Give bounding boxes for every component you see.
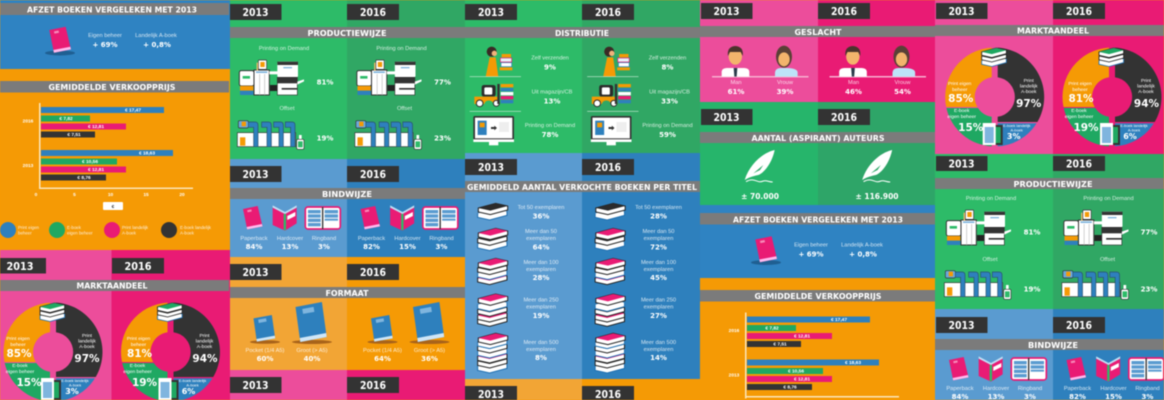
2016 book stacks: exemplaren bbox=[644, 304, 673, 310]
2016 distribution: 33% bbox=[661, 98, 678, 106]
2016 production: 23% bbox=[1141, 286, 1157, 294]
panel: aantal aspirant auteurs (column 4): 2016 bbox=[831, 111, 857, 124]
year labels: bottom of column 2 bbox=[230, 377, 399, 393]
bar chart: prices: 0 bbox=[35, 192, 38, 198]
donut chart: 2013: A-boek bbox=[69, 382, 81, 388]
heading: afzet boeken: AFZET BOEKEN VERGELEKEN MET 2013 bbox=[27, 6, 197, 14]
2016 binding bbox=[358, 205, 458, 251]
donut chart: 2013: landelijk bbox=[78, 338, 96, 344]
legend: A-boek bbox=[180, 230, 195, 236]
legend: eigen beheer bbox=[67, 230, 93, 236]
donut chart: 2016: E-boek bbox=[130, 363, 146, 369]
heading: bindwijze: BINDWIJZE bbox=[1028, 341, 1078, 350]
panel: bindwijze (column 2): 2016 bbox=[360, 168, 386, 181]
bar chart: prices: € 7,51 bbox=[67, 132, 81, 138]
panel: productiewijze (column 5): 2013 bbox=[948, 158, 974, 170]
panel: marktaandeel (column 1) bbox=[0, 258, 229, 400]
heading: geslacht: GESLACHT bbox=[794, 28, 842, 37]
2016 gender: 46% bbox=[845, 88, 862, 96]
donut chart: 2013: E-boek landelijk bbox=[61, 378, 89, 383]
2016 production: Offset bbox=[397, 106, 412, 112]
panel: aantal aspirant auteurs (column 4): 2013 bbox=[714, 111, 740, 124]
donut chart: 2016: A-boek bbox=[186, 382, 199, 388]
2013 book stacks: 19% bbox=[533, 312, 549, 320]
donut chart: 2016: 94% bbox=[1134, 98, 1160, 110]
panel: gemiddeld aantal verkochte boeken per titel (column 3): 2016 bbox=[595, 161, 621, 174]
donut chart: 2016 bbox=[1062, 48, 1161, 146]
heading: gemiddelde verkoopprijs: GEMIDDELDE VERKOOPPRIJS bbox=[754, 292, 882, 301]
donut chart: 2016: landelijk bbox=[196, 338, 214, 344]
donut chart: 2013: A-boek bbox=[1021, 89, 1037, 95]
2016 book stacks: Tot 50 exemplaren bbox=[635, 205, 682, 211]
legend: beheer bbox=[18, 230, 32, 236]
panel: geslacht (column 4) bbox=[700, 3, 935, 96]
2016 book stacks: Meer dan 500 bbox=[641, 340, 676, 346]
2013 gender: 39% bbox=[777, 88, 793, 96]
2013 production: Offset bbox=[982, 257, 998, 263]
2013 binding: 3% bbox=[318, 243, 330, 251]
donut chart: 2016: A-boek bbox=[1138, 89, 1154, 95]
2016 distribution: 59% bbox=[659, 131, 676, 139]
bar chart: prices: € 7,51 bbox=[773, 342, 787, 348]
donut chart: 2016: 81% bbox=[1068, 93, 1094, 105]
2013 production: 19% bbox=[317, 134, 333, 142]
donut chart: 2016: 94% bbox=[192, 353, 218, 365]
2016 book stacks: exemplaren bbox=[644, 236, 673, 242]
donut chart: 2016: 19% bbox=[132, 377, 158, 389]
donut chart: 2013: beheer bbox=[10, 342, 26, 348]
panel: distributie (column 3): 2013 bbox=[478, 6, 504, 19]
2013 production bbox=[237, 46, 333, 149]
2016 production: 77% bbox=[1141, 228, 1157, 236]
2013 book stacks: exemplaren bbox=[526, 347, 556, 353]
2016 production bbox=[355, 46, 451, 149]
bar chart: prices: € 8,76 bbox=[783, 385, 797, 391]
heading: auteurs: AANTAL (ASPIRANT) AUTEURS bbox=[752, 134, 885, 143]
donut chart: 2013 bbox=[3, 303, 102, 400]
donut chart: 2013: landelijk bbox=[1020, 84, 1038, 90]
panel: gemiddeld aantal verkochte boeken per titel (column 3): 2013 bbox=[478, 161, 504, 174]
panel: geslacht (column 4): 2016 bbox=[831, 5, 857, 18]
panel: productiewijze (column 5): 2016 bbox=[1066, 158, 1092, 170]
2013 book stacks: 28% bbox=[533, 274, 549, 282]
2013 distribution: 13% bbox=[544, 98, 560, 106]
heading: distributie: DISTRIBUTIE bbox=[555, 29, 609, 38]
donut chart: 2013: Print eigen bbox=[6, 336, 30, 342]
heading: boeken per titel: GEMIDDELD AANTAL VERKOCHTE BOEKEN PER TITEL bbox=[467, 183, 697, 192]
donut chart: 2013: 15% bbox=[16, 377, 42, 389]
panel: aantal aspirant auteurs (column 4): ± 70.000 bbox=[741, 192, 779, 201]
year labels: bottom of column 2: 2016 bbox=[360, 379, 386, 392]
panel: distributie (column 3): 2016 bbox=[595, 6, 621, 19]
bar chart: prices: 2016 bbox=[729, 328, 740, 334]
2013 production: 81% bbox=[317, 78, 333, 86]
2013 production bbox=[944, 196, 1040, 299]
donut chart: 2016 bbox=[121, 303, 220, 400]
2013 binding: Paperback bbox=[240, 236, 268, 242]
2016 gender bbox=[830, 46, 926, 96]
panel: marktaandeel (column 1): 2013 bbox=[6, 260, 34, 273]
donut chart: 2013: A-boek bbox=[1011, 128, 1023, 132]
2013 binding: 13% bbox=[282, 243, 298, 251]
2013 binding: Hardcover bbox=[277, 236, 303, 242]
2016 production: 77% bbox=[434, 78, 451, 86]
legend: E-boek bbox=[67, 225, 82, 230]
2016 production bbox=[1062, 196, 1157, 299]
2013 binding: Paperback bbox=[946, 386, 974, 392]
2016 gender: 54% bbox=[894, 88, 911, 96]
2013 book stacks: Meer dan 500 bbox=[523, 340, 559, 346]
donut chart: 2016: eigen beheer bbox=[1065, 114, 1094, 120]
donut chart: 2016: 6% bbox=[182, 387, 195, 396]
panel: productiewijze (column 5) bbox=[935, 156, 1164, 299]
donut chart: 2013: Print eigen bbox=[948, 81, 972, 87]
panel: afzet boeken (column 1) bbox=[0, 3, 229, 56]
2013 distribution: Zelf verzenden bbox=[531, 56, 569, 62]
2016 distribution: Zelf verzenden bbox=[649, 56, 686, 62]
heading: productiewijze: PRODUCTIEWIJZE bbox=[1014, 180, 1092, 189]
panel: productiewijze (column 2) bbox=[230, 4, 465, 149]
panel: afzet boeken (column 1): + 0,8% bbox=[143, 41, 171, 49]
donut chart: 2013: beheer bbox=[952, 87, 968, 93]
2016 book stacks: exemplaren bbox=[644, 347, 673, 353]
2016 book stacks: 28% bbox=[650, 212, 667, 220]
2016 distribution bbox=[587, 47, 693, 145]
panel: bindwijze (column 5): 2013 bbox=[948, 319, 974, 332]
2016 format: 64% bbox=[374, 355, 391, 363]
bar chart: prices: € 17,47 bbox=[125, 108, 141, 114]
2016 book stacks: Meer dan 50 bbox=[643, 229, 674, 235]
bar chart: prices: € 12,81 bbox=[794, 377, 810, 383]
donut chart: 2016: 19% bbox=[1073, 122, 1099, 134]
2013 binding: Ringband bbox=[1018, 386, 1042, 392]
2013 distribution: 78% bbox=[542, 131, 558, 139]
bar chart: prices: 2013 bbox=[23, 163, 34, 169]
2016 binding: 82% bbox=[363, 243, 380, 251]
panel: formaat (column 2): 2013 bbox=[242, 266, 268, 279]
bar chart: prices bbox=[23, 103, 193, 210]
2013 binding: 84% bbox=[246, 243, 262, 251]
donut chart: 2016: 81% bbox=[127, 348, 153, 360]
2013 binding bbox=[240, 205, 340, 251]
heading: afzet boeken: AFZET BOEKEN VERGELEKEN MET 2013 bbox=[733, 215, 903, 224]
2016 format: Groot (> A5) bbox=[414, 348, 445, 354]
2013 distribution bbox=[470, 47, 575, 145]
2016 book stacks: 14% bbox=[650, 354, 667, 362]
panel: formaat (column 2) bbox=[230, 264, 465, 363]
2016 binding bbox=[1064, 356, 1164, 400]
2016 binding: Paperback bbox=[358, 236, 385, 242]
donut chart: 2013: eigen beheer bbox=[947, 114, 976, 120]
panel: gemiddelde verkoopprijs (column 1) bbox=[0, 81, 229, 238]
2013 distribution: Printing on Demand bbox=[525, 123, 575, 129]
donut chart: 2013: E-boek bbox=[954, 108, 970, 114]
2013 book stacks: Tot 50 exemplaren bbox=[518, 205, 564, 211]
2016 distribution: Uit magazijn/CB bbox=[649, 90, 690, 96]
2016 book stacks: Meer dan 250 bbox=[641, 298, 676, 304]
bar chart: prices: € 18,63 bbox=[139, 151, 155, 157]
2013 format: 40% bbox=[304, 355, 320, 363]
2013 production: Printing on Demand bbox=[966, 196, 1016, 202]
2013 gender: Man bbox=[730, 80, 742, 86]
panel: distributie (column 3) bbox=[465, 4, 700, 145]
bar chart: prices: € 7,82 bbox=[59, 116, 73, 122]
2013 format: Pocket (1/4 A5) bbox=[246, 348, 285, 354]
icon: quill 2016 bbox=[862, 150, 892, 182]
2016 book stacks bbox=[595, 203, 682, 373]
donut chart: 2016: beheer bbox=[131, 342, 146, 348]
donut chart: 2013: Print bbox=[1024, 78, 1034, 84]
bar chart: prices bbox=[729, 312, 899, 398]
panel: marktaandeel (column 5) bbox=[935, 3, 1164, 146]
2013 book stacks: 8% bbox=[535, 354, 547, 362]
2013 book stacks: Meer dan 50 bbox=[525, 229, 557, 235]
donut chart: 2013: 97% bbox=[74, 353, 100, 365]
donut chart: 2013: E-boek bbox=[12, 363, 28, 369]
bar chart: prices: € 12,81 bbox=[88, 124, 104, 130]
donut chart: 2016: Print bbox=[1141, 78, 1152, 84]
legend: Print eigen bbox=[18, 225, 40, 230]
2016 production: Offset bbox=[1100, 257, 1115, 263]
bar chart: prices: € bbox=[112, 204, 115, 210]
panel: afzet boeken (column 1): Eigen beheer bbox=[88, 33, 122, 39]
donut chart: 2013: Print bbox=[82, 333, 93, 339]
2013 production: Offset bbox=[279, 106, 295, 112]
donut chart: 2013: 3% bbox=[65, 387, 79, 396]
2013 binding bbox=[946, 356, 1046, 400]
2013 book stacks: Meer dan 250 bbox=[523, 298, 559, 304]
donut chart: 2013: 85% bbox=[6, 348, 32, 360]
donut chart: 2013: 15% bbox=[958, 122, 984, 134]
column 1 backgrounds bbox=[0, 0, 230, 400]
icon: book bbox=[751, 236, 781, 265]
donut chart: 2013 bbox=[945, 48, 1044, 146]
2016 book stacks: 45% bbox=[650, 274, 667, 282]
panel: afzet boeken (column 4): Landelijk A-boek bbox=[841, 242, 883, 248]
2013 book stacks: 36% bbox=[533, 212, 549, 220]
bar chart: prices: 15 bbox=[143, 192, 149, 198]
panel: marktaandeel (column 5): 2016 bbox=[1066, 5, 1092, 18]
panel: afzet boeken (column 1): + 69% bbox=[92, 41, 118, 49]
panel: afzet boeken (column 4): Eigen beheer bbox=[794, 242, 828, 248]
bar chart: prices: 10 bbox=[108, 192, 113, 198]
2013 gender: Vrouw bbox=[777, 80, 794, 86]
bar chart: prices: € 12,81 bbox=[794, 334, 810, 340]
2013 book stacks: 64% bbox=[533, 244, 549, 252]
panel: afzet boeken (column 4): + 69% bbox=[798, 250, 824, 258]
heading: marktaandeel: MARKTAANDEEL bbox=[76, 282, 148, 291]
panel: geslacht (column 4): 2013 bbox=[714, 5, 740, 18]
bar chart: prices: 20 bbox=[179, 192, 185, 198]
2016 book stacks: 72% bbox=[650, 244, 667, 252]
donut chart: 2013: 97% bbox=[1016, 98, 1042, 110]
legend: E-boek landelijk bbox=[180, 225, 212, 230]
panel: marktaandeel (column 1): 2016 bbox=[124, 260, 152, 273]
heading: marktaandeel: MARKTAANDEEL bbox=[1017, 27, 1089, 36]
2013 book stacks: exemplaren bbox=[526, 236, 556, 242]
column 3 backgrounds bbox=[465, 0, 700, 400]
donut chart: 2013: E-boek landelijk bbox=[1003, 123, 1030, 128]
2016 gender: Vrouw bbox=[895, 80, 911, 86]
bar chart: prices: € 10,56 bbox=[788, 369, 804, 375]
donut chart: 2013: 85% bbox=[948, 93, 974, 105]
2013 distribution: 9% bbox=[544, 64, 556, 72]
panel: bindwijze (column 2) bbox=[230, 166, 465, 251]
2013 production: 81% bbox=[1024, 228, 1040, 236]
panel: productiewijze (column 2): 2016 bbox=[360, 6, 386, 19]
panel: afzet boeken (column 4) bbox=[700, 213, 935, 265]
panel: gemiddelde verkoopprijs (column 4) bbox=[700, 290, 935, 398]
bar chart: prices: € 18,63 bbox=[845, 360, 861, 366]
2013 production: 19% bbox=[1024, 286, 1040, 294]
2016 book stacks: Meer dan 100 bbox=[641, 260, 676, 266]
2013 distribution: Uit magazijn/CB bbox=[532, 90, 573, 96]
2016 book stacks: 27% bbox=[650, 312, 667, 320]
donut chart: 2016: landelijk bbox=[1137, 84, 1155, 90]
year labels: bottom of column 2: 2013 bbox=[242, 379, 268, 392]
panel: marktaandeel (column 5): 2013 bbox=[948, 5, 974, 18]
donut chart: 2016: Print eigen bbox=[1068, 81, 1092, 87]
2016 format: 36% bbox=[421, 355, 438, 363]
2016 production: Printing on Demand bbox=[1083, 196, 1134, 202]
2016 book stacks: exemplaren bbox=[644, 267, 673, 273]
donut chart: 2013: 3% bbox=[1007, 132, 1020, 141]
2016 production: Printing on Demand bbox=[376, 46, 427, 52]
donut chart: 2016: Print eigen bbox=[127, 336, 150, 342]
2013 book stacks: exemplaren bbox=[526, 267, 556, 273]
2016 binding: 3% bbox=[436, 243, 447, 251]
column 5 backgrounds bbox=[935, 0, 1164, 400]
2016 distribution: Printing on Demand bbox=[642, 123, 693, 129]
bar chart: prices: 2013 bbox=[729, 372, 740, 378]
icon: book bbox=[45, 27, 75, 56]
panel: aantal aspirant auteurs (column 4) bbox=[700, 109, 935, 201]
bar chart: prices: € 12,81 bbox=[88, 167, 104, 173]
legend: Print landelijk bbox=[122, 225, 149, 230]
year labels: bottom of column 3 bbox=[465, 386, 634, 400]
bar chart: prices: € 17,47 bbox=[831, 317, 847, 323]
donut chart: 2016: Print bbox=[199, 333, 210, 339]
legend: A-boek bbox=[122, 230, 137, 236]
2013 format: 60% bbox=[257, 355, 273, 363]
column 4 backgrounds bbox=[700, 0, 935, 400]
panel: afzet boeken (column 1): Landelijk A-boek bbox=[135, 33, 177, 39]
2016 format: Pocket (1/4 A5) bbox=[363, 348, 402, 354]
2013 book stacks: exemplaren bbox=[526, 304, 556, 310]
bar chart: prices: 2016 bbox=[23, 118, 34, 124]
2016 gender: Man bbox=[848, 80, 859, 86]
donut chart: 2016: E-boek bbox=[1071, 108, 1087, 114]
2013 production: Printing on Demand bbox=[259, 46, 309, 52]
2013 binding: Ringband bbox=[312, 236, 336, 242]
donut chart: 2016: E-boek landelijk bbox=[1120, 123, 1148, 128]
2016 binding: Hardcover bbox=[394, 236, 421, 242]
bar chart: prices: € 7,82 bbox=[765, 326, 779, 332]
2016 format bbox=[363, 302, 450, 363]
panel: aantal aspirant auteurs (column 4): ± 116.900 bbox=[855, 192, 899, 201]
heading: bindwijze: BINDWIJZE bbox=[322, 190, 372, 199]
2013 book stacks bbox=[478, 203, 564, 373]
panel: formaat (column 2): 2016 bbox=[360, 266, 386, 279]
2016 distribution: 8% bbox=[662, 64, 673, 72]
donut chart: 2013: A-boek bbox=[79, 344, 95, 350]
2016 production: 23% bbox=[434, 134, 451, 142]
bar chart: prices: € 8,76 bbox=[77, 175, 91, 181]
panel: bindwijze (column 5): 2016 bbox=[1066, 319, 1092, 332]
column 2 backgrounds bbox=[230, 0, 465, 400]
donut chart: 2016: A-boek bbox=[197, 344, 213, 350]
panel: bindwijze (column 2): 2013 bbox=[242, 168, 268, 181]
2013 binding: Hardcover bbox=[983, 386, 1009, 392]
2013 gender: 61% bbox=[728, 88, 744, 96]
heading: gemiddelde verkoopprijs: GEMIDDELDE VERKOOPPRIJS bbox=[48, 83, 176, 92]
2013 format: Groot (> A5) bbox=[296, 348, 328, 354]
donut chart: 2016: eigen beheer bbox=[123, 369, 152, 375]
donut chart: 2016: beheer bbox=[1072, 87, 1088, 93]
2016 binding: Paperback bbox=[1064, 386, 1091, 392]
2016 binding: Ringband bbox=[1135, 386, 1160, 392]
2013 gender bbox=[712, 46, 808, 96]
donut chart: 2013: eigen beheer bbox=[6, 369, 35, 375]
2013 book stacks: Meer dan 100 bbox=[523, 260, 559, 266]
bar chart: prices: € 10,56 bbox=[82, 159, 98, 165]
panel: afzet boeken (column 4): + 0,8% bbox=[849, 250, 877, 258]
donut chart: 2016: A-boek bbox=[1128, 128, 1140, 132]
2016 binding: Ringband bbox=[429, 236, 454, 242]
legend bbox=[0, 222, 212, 238]
2013 format bbox=[246, 302, 332, 363]
icon: quill 2013 bbox=[745, 150, 775, 182]
heading: formaat: FORMAAT bbox=[326, 289, 369, 298]
2016 binding: 15% bbox=[399, 243, 416, 251]
donut chart: 2016: E-boek landelijk bbox=[179, 378, 206, 383]
2016 binding: Hardcover bbox=[1100, 386, 1127, 392]
bar chart: prices: 5 bbox=[73, 192, 76, 198]
panel: bindwijze (column 5) bbox=[935, 317, 1164, 400]
heading: productiewijze: PRODUCTIEWIJZE bbox=[308, 29, 386, 38]
panel: productiewijze (column 2): 2013 bbox=[242, 6, 268, 19]
panel: gemiddeld aantal verkochte boeken per titel (column 3) bbox=[465, 159, 700, 373]
donut chart: 2016: 6% bbox=[1123, 132, 1137, 141]
